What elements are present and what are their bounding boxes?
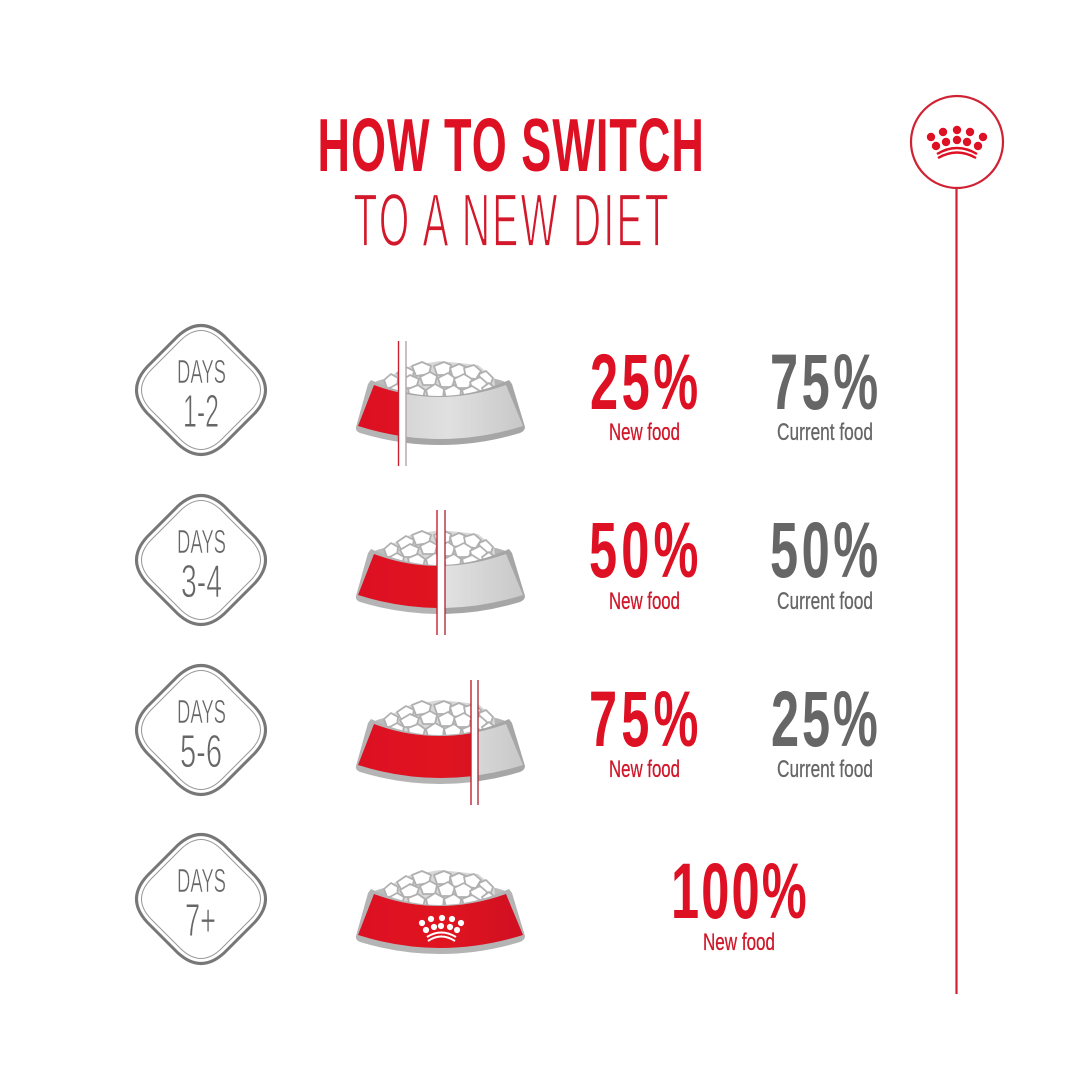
badge: days 1-2 <box>136 326 266 454</box>
stat: 75% current food: Current food <box>777 419 873 446</box>
badge: days 3-4: DAYS <box>177 523 226 560</box>
row: days 3-4 <box>136 496 878 635</box>
stat: 50% current food: Current food <box>777 588 873 615</box>
title <box>318 104 704 262</box>
stat: 25% current food: 25% <box>771 676 878 764</box>
row: days 5-6 <box>136 666 878 805</box>
stat: 75% new food: 75% <box>589 676 698 764</box>
badge: days 3-4 <box>136 496 266 624</box>
title line 2: TO A NEW DIET <box>354 178 669 262</box>
badge: days 1-2: DAYS <box>177 353 226 390</box>
stat: 50% new food: 50% <box>589 507 698 595</box>
icon: crown <box>927 126 987 158</box>
stat: 50% current food: 50% <box>770 507 878 595</box>
bowl: 25% new food <box>356 341 525 466</box>
badge: days 3-4: 3-4 <box>181 555 222 607</box>
badge: days 1-2: 1-2 <box>183 385 219 437</box>
badge: days 5-6 <box>136 666 266 794</box>
badge: days 5-6: DAYS <box>177 693 226 730</box>
bowl: 75% new food <box>356 680 525 805</box>
badge: days 7+ <box>136 834 266 964</box>
stat: 25% current food: Current food <box>777 756 873 783</box>
icon: white crown on bowl <box>419 915 464 941</box>
row: days 1-2 <box>136 326 878 466</box>
stat: 100% new food: New food <box>703 929 775 956</box>
logo circle with crown and timeline <box>911 96 1003 994</box>
stat: 50% new food: New food <box>609 588 680 615</box>
vertical timeline <box>955 188 958 994</box>
stat: 25% new food: New food <box>609 419 680 446</box>
badge: days 7+: DAYS <box>177 862 226 899</box>
bowl: 50% new food <box>356 510 525 635</box>
title line 1: HOW TO SWITCH <box>318 104 704 188</box>
stat: 100% new food: 100% <box>671 848 807 936</box>
badge: days 5-6: 5-6 <box>180 725 222 777</box>
bowl: 100% new food <box>356 870 525 954</box>
badge: days 7+: 7+ <box>185 894 216 946</box>
logo circle <box>911 96 1003 188</box>
stat: 75% current food: 75% <box>770 339 878 427</box>
row: days 7+ <box>136 834 807 964</box>
stat: 75% new food: New food <box>609 756 680 783</box>
stat: 25% new food: 25% <box>590 339 698 427</box>
